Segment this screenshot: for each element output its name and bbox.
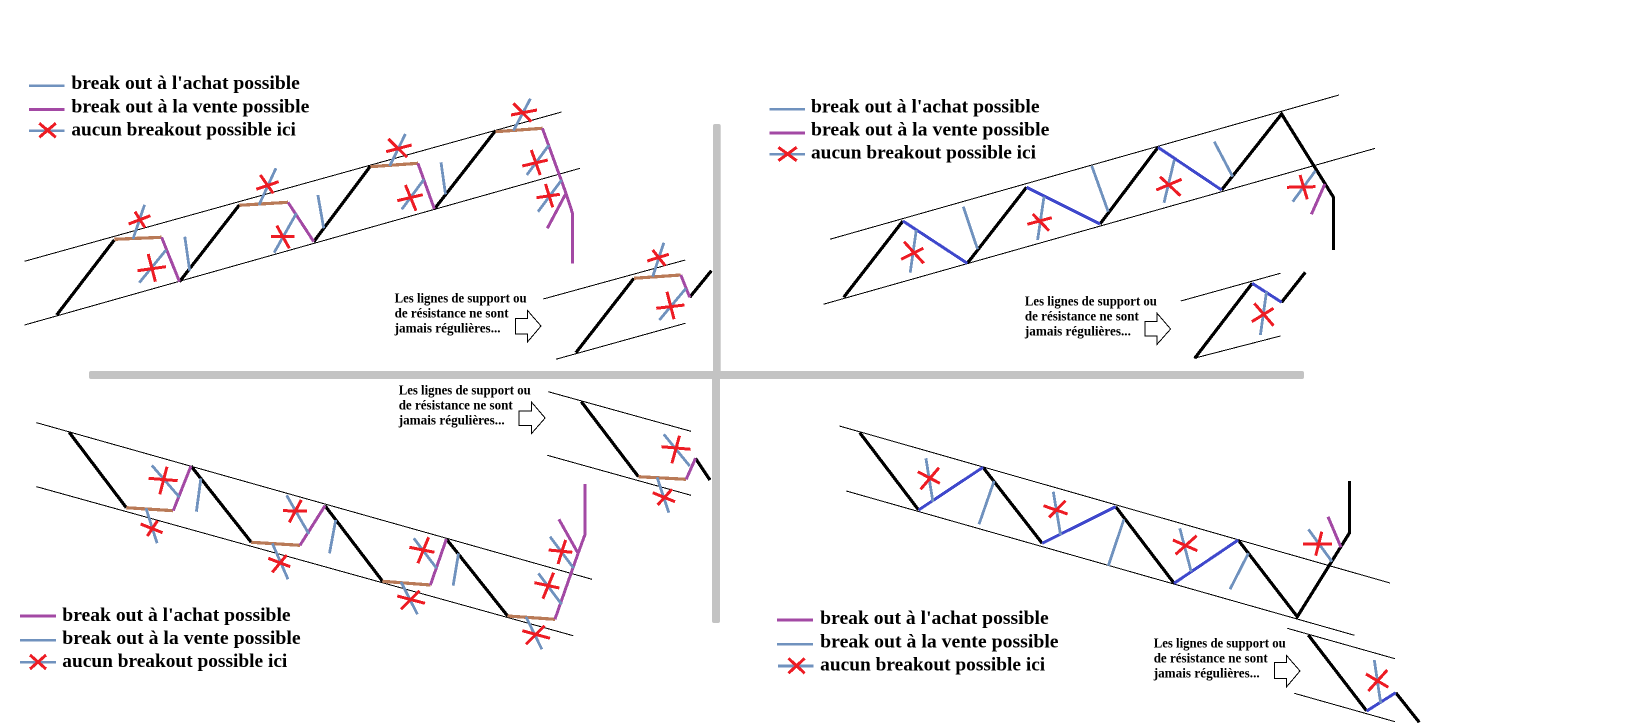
- price trend segments: [57, 131, 495, 315]
- note text: Les lignes de support ou: [1025, 293, 1157, 308]
- note text: jamais régulières...: [398, 413, 505, 428]
- note text: jamais régulières...: [394, 321, 501, 336]
- legend: bottom-right panel: [777, 608, 1059, 675]
- sell breakout line: [1311, 184, 1325, 214]
- sell breakout lines: [146, 465, 574, 649]
- note text: Les lignes de support ou: [395, 291, 527, 306]
- channel lines: [24, 112, 580, 325]
- buy breakout lines: [173, 466, 585, 619]
- note text: de résistance ne sont: [399, 398, 513, 413]
- legend: top-left panel: break out à l'achat possible: [71, 73, 300, 94]
- buy breakout lines: [910, 142, 1316, 273]
- grey cross divider: [89, 124, 1304, 623]
- note text: Les lignes de support ou: [399, 383, 531, 398]
- red crosses: [918, 468, 1332, 556]
- arrow: [519, 402, 545, 433]
- legend: top-left panel: [29, 73, 309, 140]
- legend: bottom-left panel: aucun breakout possible ici: [62, 651, 287, 672]
- buy breakout line: [1328, 517, 1341, 547]
- sell breakout lines: [162, 128, 572, 282]
- legend: bottom-right panel: break out à la vente possible: [820, 631, 1059, 652]
- legend: bottom-right panel: break out à l'achat possible: [820, 608, 1049, 629]
- note text: [398, 383, 531, 428]
- red crosses: [141, 467, 572, 644]
- legend: bottom-left panel: break out à l'achat possible: [62, 605, 291, 626]
- note text: de résistance ne sont: [1154, 650, 1268, 665]
- legend: top-right panel: break out à l'achat possible: [811, 97, 1040, 118]
- legend: top-left panel: aucun breakout possible ici: [71, 119, 296, 140]
- channel lines: [839, 426, 1390, 635]
- consolidation segments: [114, 128, 542, 239]
- sell breakout lines: [926, 458, 1332, 589]
- legend: bottom-left panel: [20, 605, 301, 672]
- inset chart: [1181, 272, 1305, 358]
- note text: jamais régulières...: [1153, 665, 1260, 680]
- legend: top-right panel: [769, 97, 1049, 164]
- price trend segments: [844, 114, 1334, 297]
- note text: [394, 291, 527, 336]
- pullback segments: [903, 147, 1222, 263]
- arrow: [1274, 656, 1300, 687]
- panel: rising channel, consolidation at the top: [24, 73, 711, 359]
- channel lines: [37, 423, 592, 636]
- legend: top-right panel: break out à la vente possible: [811, 120, 1049, 141]
- panel: rising channel, zigzag: [769, 95, 1375, 358]
- inset chart: [1287, 628, 1419, 722]
- legend: top-right panel: aucun breakout possible ici: [811, 143, 1036, 164]
- panel: falling channel, zigzag: [777, 426, 1419, 722]
- arrow: [1145, 313, 1171, 344]
- note text: jamais régulières...: [1024, 323, 1131, 338]
- red crosses: [901, 175, 1316, 263]
- note text: [1153, 635, 1286, 680]
- inset chart: [543, 243, 711, 359]
- red crosses: [129, 103, 560, 282]
- legend: bottom-left panel: break out à la vente possible: [62, 628, 301, 649]
- note text: [1024, 293, 1157, 338]
- legend: top-left panel: break out à la vente possible: [71, 96, 309, 117]
- note text: de résistance ne sont: [395, 306, 509, 321]
- pullback segments: [919, 467, 1238, 583]
- note text: de résistance ne sont: [1025, 308, 1139, 323]
- arrow: [516, 311, 541, 342]
- price trend segments: [860, 433, 1350, 617]
- buy breakout lines: [133, 99, 562, 283]
- price trend segments: [69, 432, 508, 616]
- channel lines: [823, 95, 1375, 304]
- inset chart: [547, 392, 710, 513]
- consolidation segments: [126, 508, 555, 619]
- note text: Les lignes de support ou: [1154, 635, 1286, 650]
- legend: bottom-right panel: aucun breakout possible ici: [820, 654, 1045, 675]
- panel: falling channel, consolidation at the bottom: [20, 383, 710, 672]
